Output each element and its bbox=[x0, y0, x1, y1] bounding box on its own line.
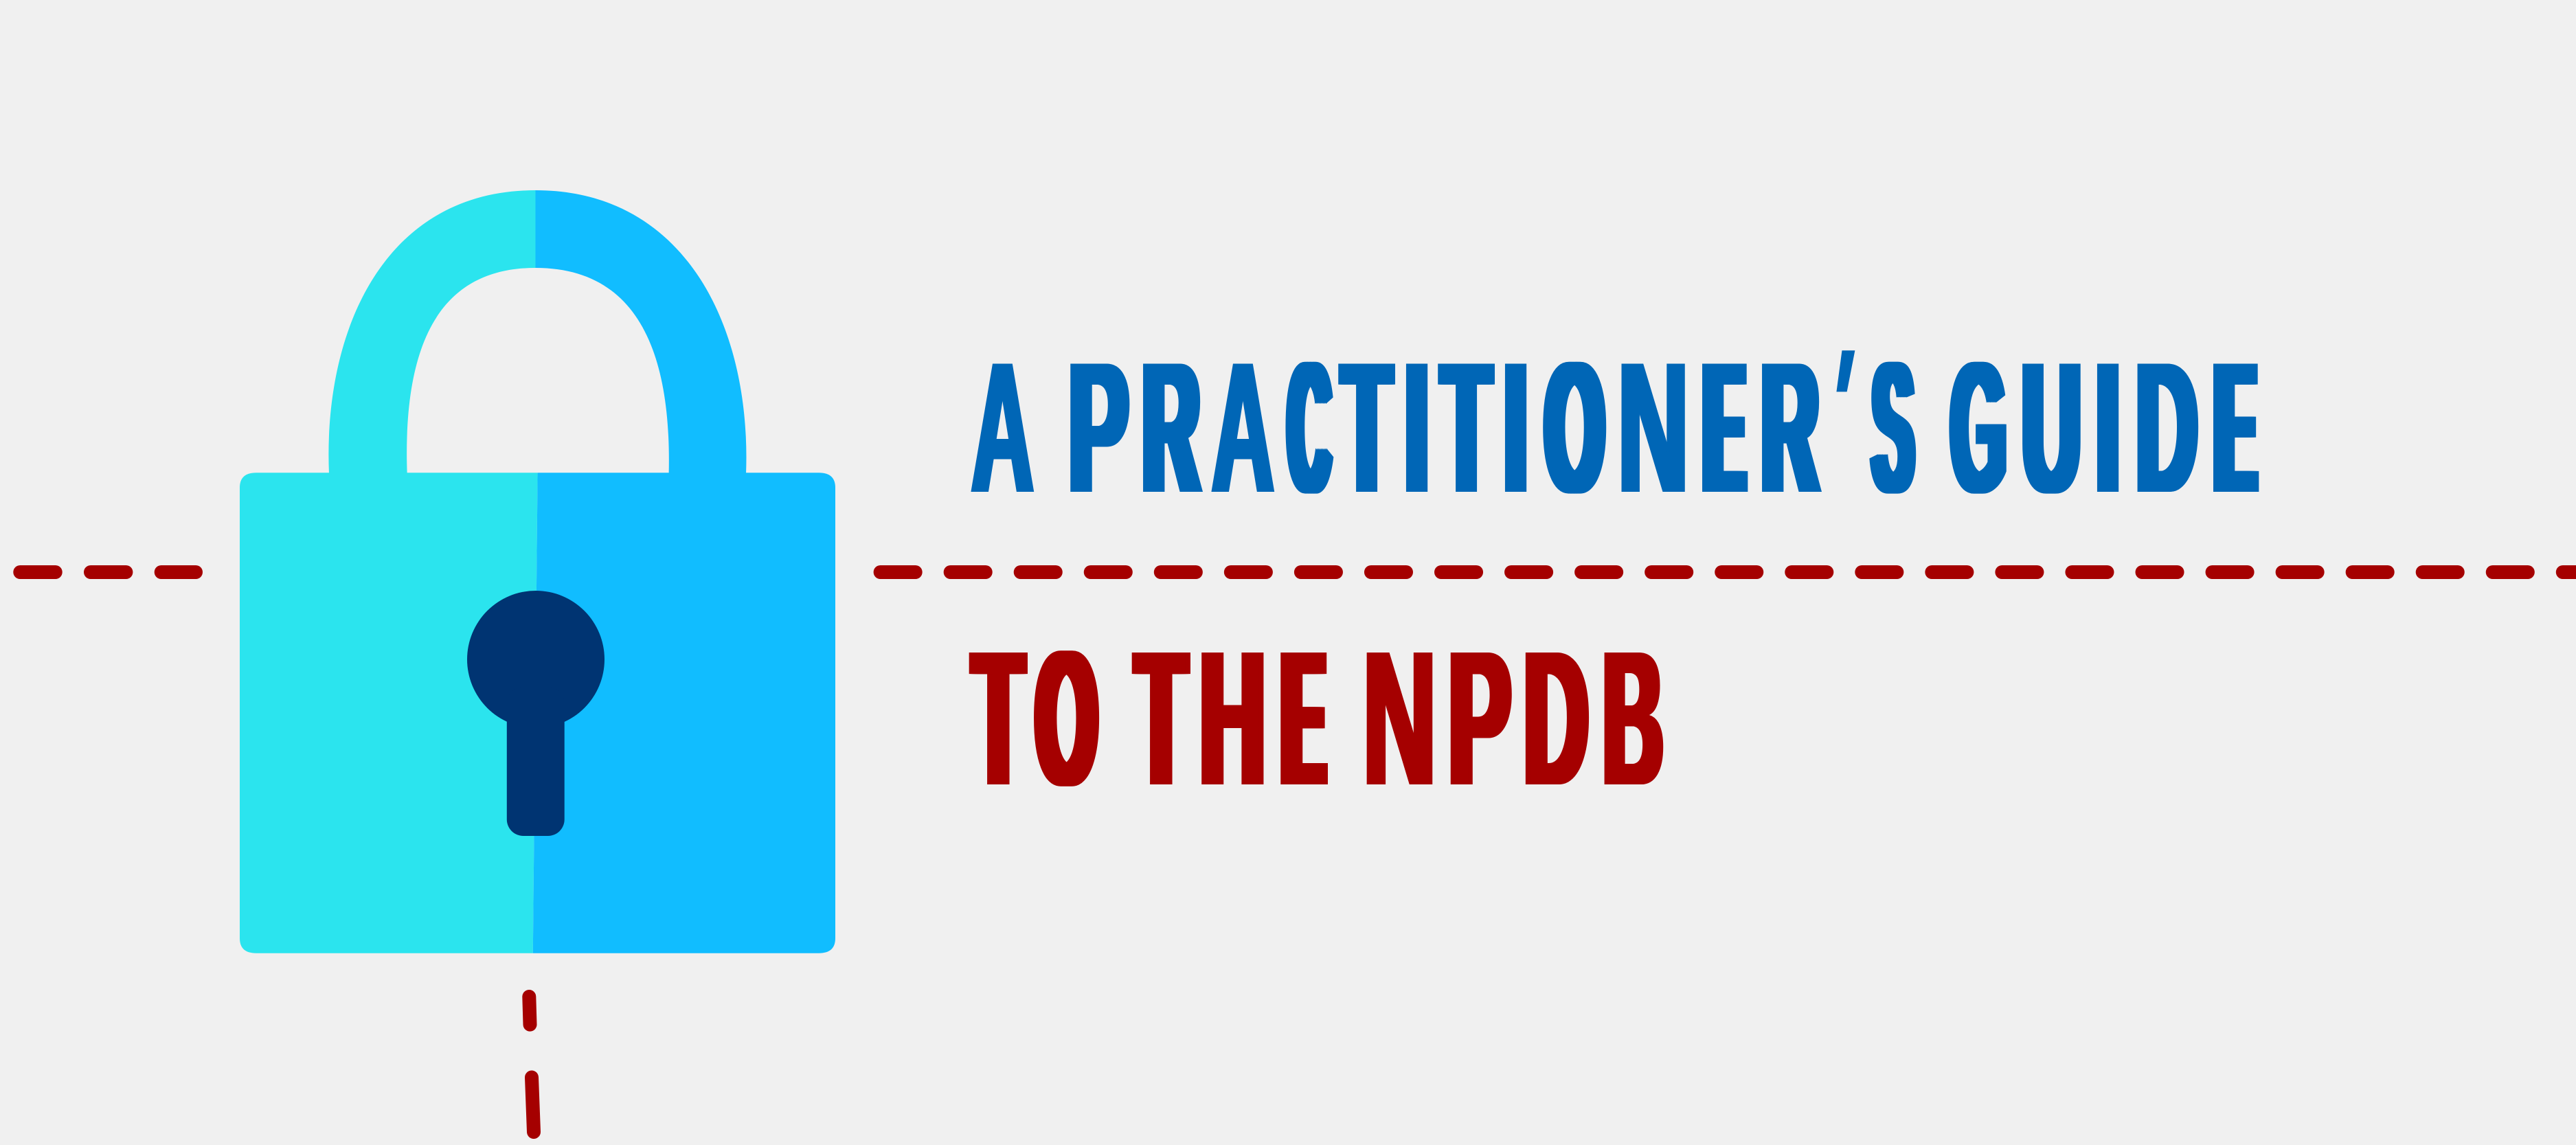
title line 1: A Practitioner's Guide: T bbox=[1442, 324, 1491, 532]
title line 1: A Practitioner's Guide: ' bbox=[1813, 315, 1866, 500]
title line 2: To the NPDB: D bbox=[1524, 611, 1588, 826]
title line 2: To the NPDB: B bbox=[1603, 611, 1662, 826]
padlock body left half bbox=[240, 473, 538, 953]
title line 1: A Practitioner's Guide: R bbox=[1143, 324, 1199, 532]
title line 1: A Practitioner's Guide: N bbox=[1617, 324, 1688, 532]
title line 2: To the NPDB bbox=[969, 611, 1664, 826]
title line 1: A Practitioner's Guide: P bbox=[1069, 324, 1128, 532]
padlock shackle right half bbox=[536, 190, 746, 474]
title line 1: A Practitioner's Guide: I bbox=[2097, 324, 2119, 532]
keyhole bbox=[467, 591, 605, 836]
title line 1: A Practitioner's Guide: O bbox=[1546, 324, 1603, 532]
title line 1: A Practitioner's Guide: U bbox=[2022, 324, 2081, 532]
title line 1: A Practitioner's Guide: T bbox=[1342, 324, 1391, 532]
title line 1: A Practitioner's Guide: A bbox=[1212, 324, 1274, 532]
title line 1: A Practitioner's Guide: E bbox=[1705, 324, 1743, 532]
title line 2: To the NPDB: T bbox=[973, 611, 1024, 826]
title line 1: A Practitioner's Guide: S bbox=[1873, 324, 1914, 532]
dashed line: right of lock bbox=[881, 565, 2576, 579]
title line 1: A Practitioner's Guide: I bbox=[1405, 324, 1428, 532]
title line 1: A Practitioner's Guide: C bbox=[1289, 324, 1329, 532]
title line 1: A Practitioner's Guide: G bbox=[1951, 324, 2007, 532]
title line 1: A Practitioner's Guide bbox=[971, 315, 2259, 532]
title line 2: To the NPDB: E bbox=[1283, 611, 1324, 826]
icon: padlock bbox=[240, 190, 835, 953]
title line 1: A Practitioner's Guide: D bbox=[2136, 324, 2197, 532]
title line 2: To the NPDB: H bbox=[1200, 611, 1265, 826]
padlock body right half bbox=[533, 473, 835, 953]
title line 1: A Practitioner's Guide: I bbox=[1504, 324, 1527, 532]
title line 2: To the NPDB: N bbox=[1363, 611, 1436, 826]
dashed line: below lock bbox=[529, 997, 534, 1132]
title line 1: A Practitioner's Guide: E bbox=[2216, 324, 2255, 532]
title line 2: To the NPDB: P bbox=[1449, 611, 1511, 826]
title line 1: A Practitioner's Guide: R bbox=[1762, 324, 1818, 532]
title line 1: A Practitioner's Guide: A bbox=[971, 324, 1034, 532]
title line 2: To the NPDB: O bbox=[1037, 611, 1096, 826]
dashed line: left of lock bbox=[20, 565, 196, 579]
title line 2: To the NPDB: T bbox=[1136, 611, 1186, 826]
padlock shackle left half bbox=[328, 190, 536, 474]
